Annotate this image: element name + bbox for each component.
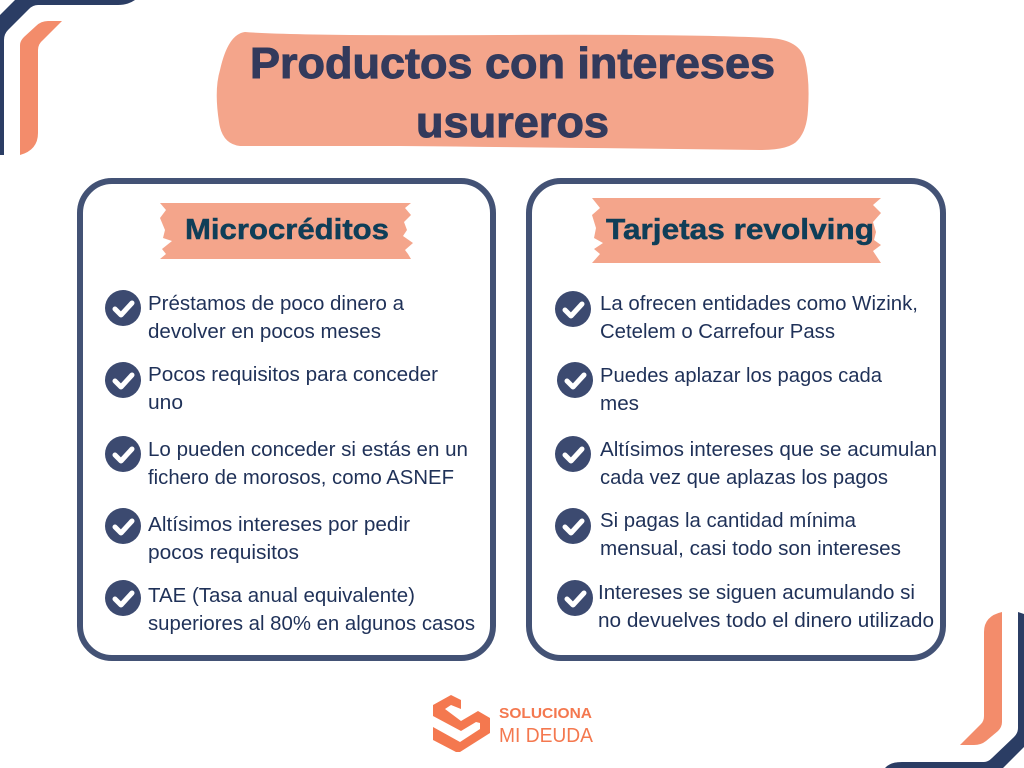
item 3: Lo pueden conceder si estás en un: [148, 439, 468, 461]
item 2: [557, 362, 883, 415]
item 2: Pocos requisitos para conceder: [148, 364, 438, 386]
title brush background: [217, 32, 809, 150]
heading: tarjetas revolving: [592, 198, 881, 263]
item 2: [105, 362, 438, 414]
item 5: no devuelves todo el dinero utilizado: [598, 610, 934, 632]
item 3: Altísimos intereses que se acumulan: [600, 439, 937, 461]
item 1: devolver en pocos meses: [148, 321, 381, 343]
title: usureros: [416, 98, 609, 147]
title: [217, 32, 809, 150]
item 5: [105, 580, 475, 635]
logo: soluciona mi deuda: SOLUCIONA: [499, 705, 592, 722]
logo: soluciona mi deuda: [433, 695, 594, 752]
item 4: Altísimos intereses por pedir: [148, 514, 410, 536]
item 5: superiores al 80% en algunos casos: [148, 613, 475, 635]
item 1: Cetelem o Carrefour Pass: [600, 321, 835, 343]
item 4: pocos requisitos: [148, 542, 299, 564]
panel: microcréditos: [80, 181, 493, 658]
item 1: La ofrecen entidades como Wizink,: [600, 293, 918, 315]
item 2: Puedes aplazar los pagos cada: [600, 365, 883, 387]
logo: soluciona mi deuda: MI DEUDA: [499, 725, 594, 747]
panel: tarjetas revolving: [529, 181, 943, 658]
item 4: mensual, casi todo son intereses: [600, 538, 901, 560]
item 5: TAE (Tasa anual equivalente): [148, 585, 415, 607]
item 5: [557, 580, 934, 632]
corner decoration: bottom right: [885, 612, 1024, 768]
item 3: [555, 436, 937, 489]
item 2: uno: [148, 392, 183, 414]
item 1: [555, 291, 918, 343]
item 4: [105, 508, 410, 564]
heading: microcréditos: Microcréditos: [185, 214, 389, 246]
item 3: [105, 436, 468, 489]
icon: logo S mark: [433, 695, 490, 752]
title: Productos con intereses: [250, 39, 775, 88]
item 5: Intereses se siguen acumulando si: [598, 582, 915, 604]
item 1: Préstamos de poco dinero a: [148, 293, 405, 315]
heading: microcréditos: [160, 203, 413, 259]
item 4: [555, 508, 901, 560]
item 3: fichero de morosos, como ASNEF: [148, 467, 454, 489]
corner decoration: top left: [0, 0, 135, 155]
item 1: [105, 290, 405, 343]
item 3: cada vez que aplazas los pagos: [600, 467, 888, 489]
heading: tarjetas revolving: Tarjetas revolving: [606, 214, 874, 246]
item 4: Si pagas la cantidad mínima: [600, 510, 857, 532]
item 2: mes: [600, 393, 639, 415]
